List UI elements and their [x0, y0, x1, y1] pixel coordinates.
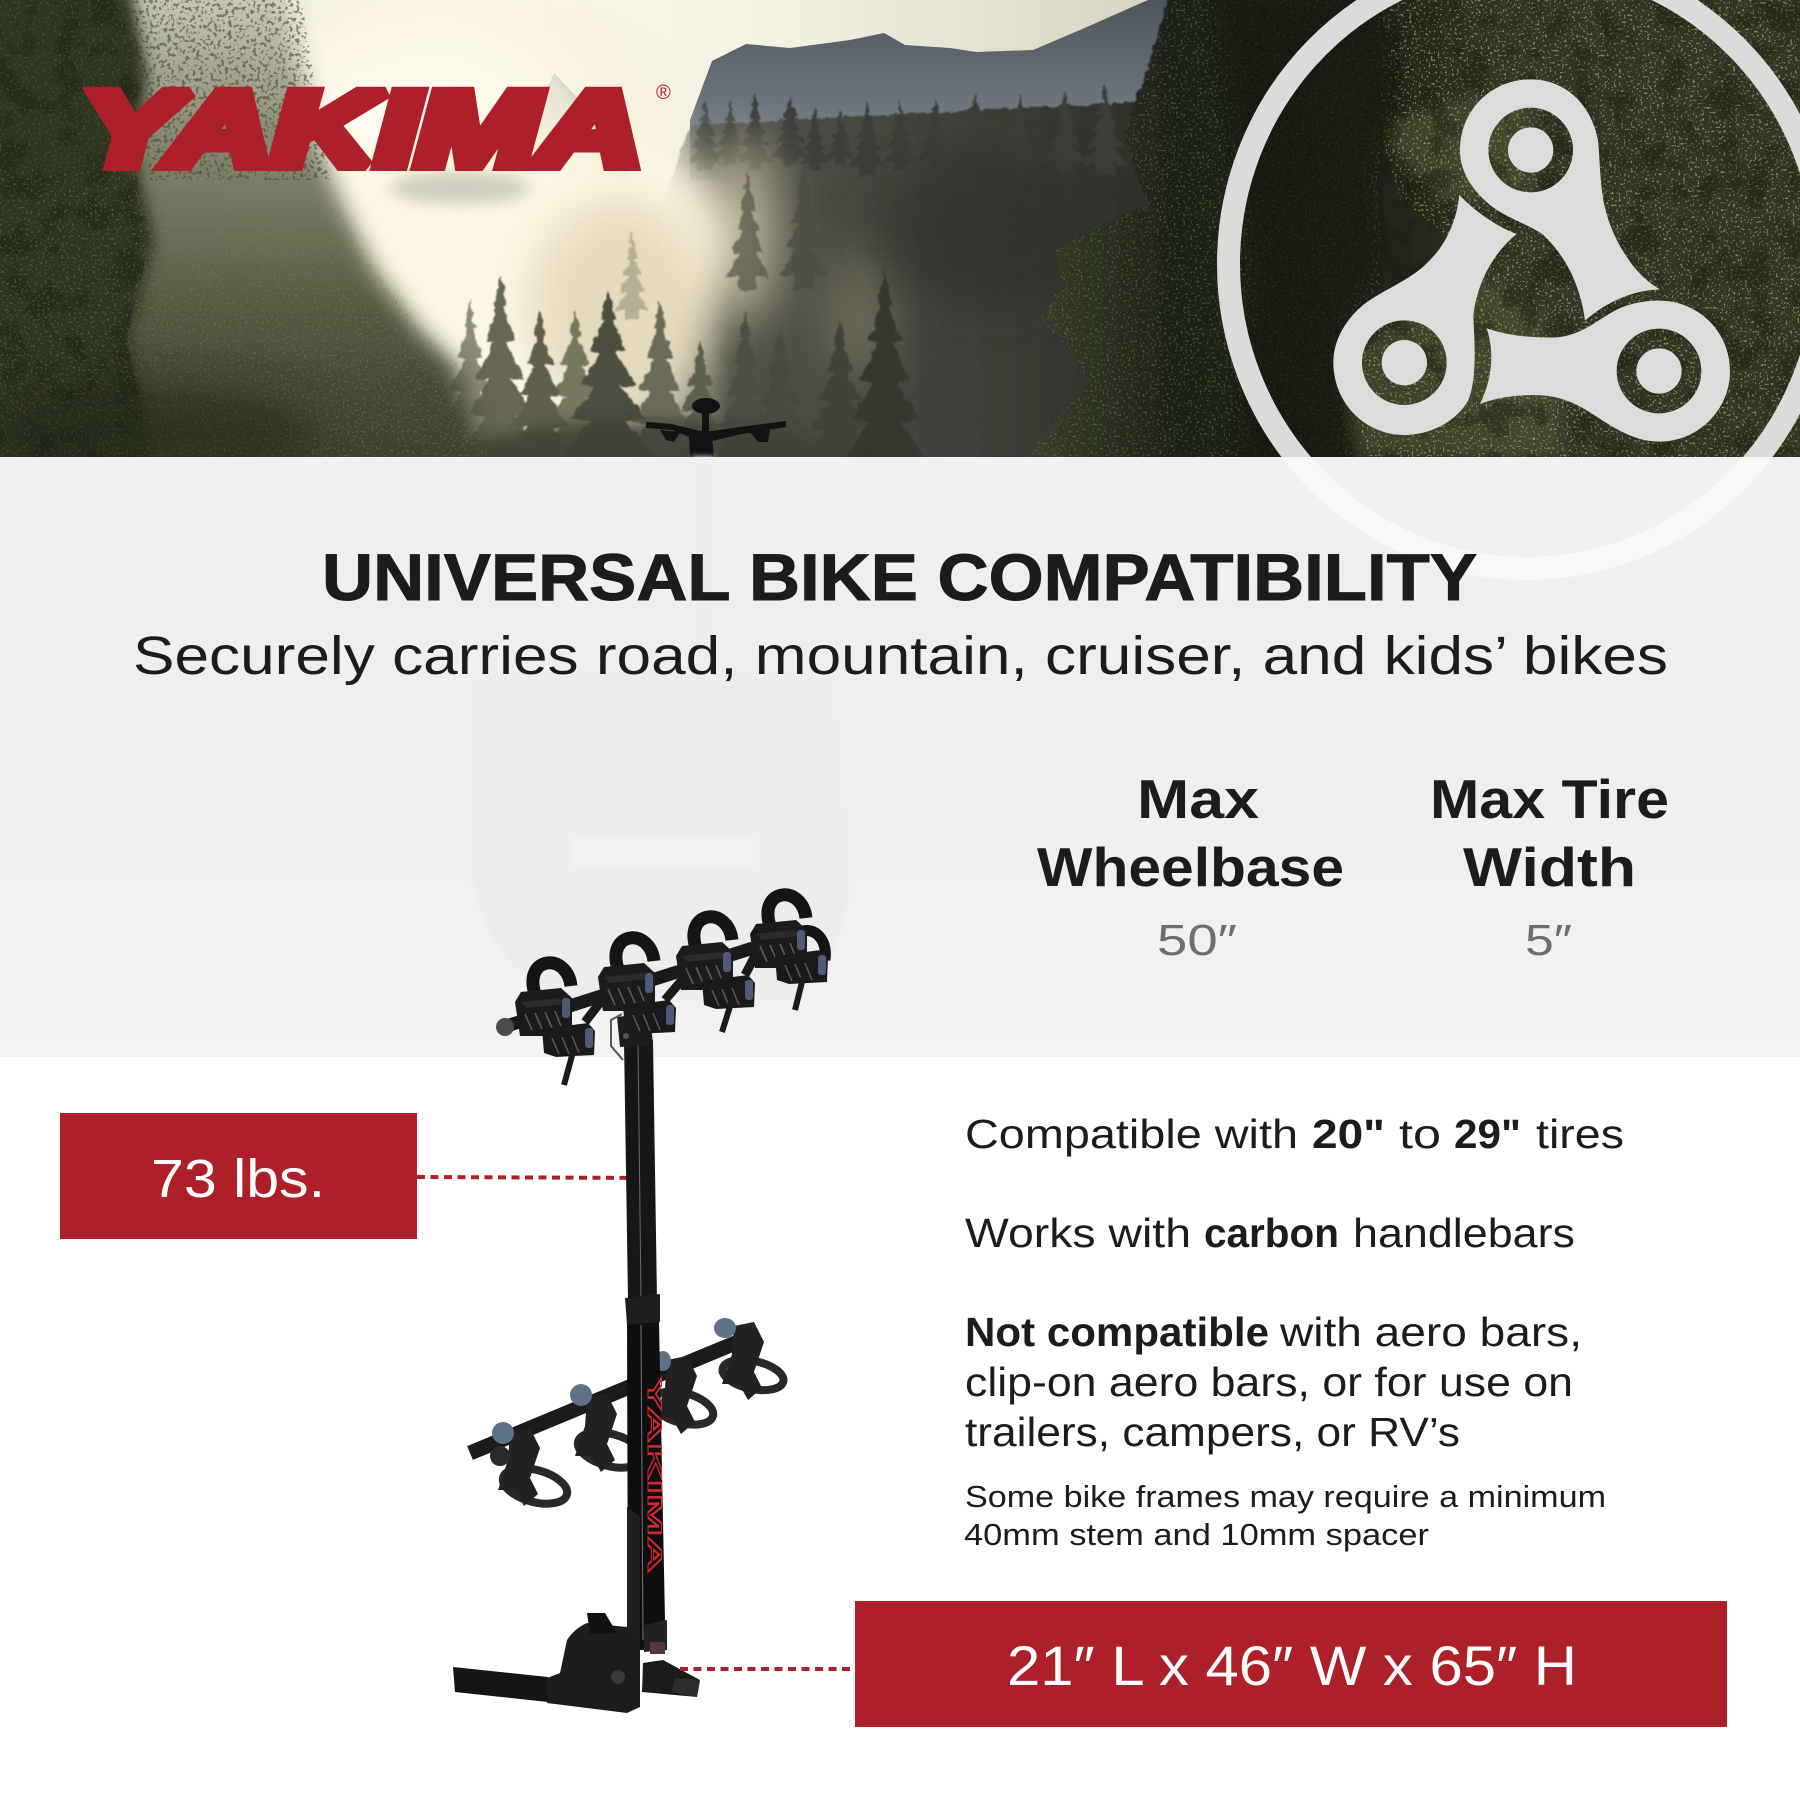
icon: ring around chain link	[1228, 0, 1800, 568]
value: 5 inches: 5″	[1525, 916, 1572, 965]
text: frame note	[964, 1479, 1606, 1552]
right foreground forest	[1020, 0, 1800, 470]
spec: max tire width	[1430, 768, 1669, 965]
mountains	[538, 0, 1169, 180]
upper wheel trays	[515, 895, 828, 1085]
text: carbon handlebars: handlebars	[1353, 1210, 1575, 1256]
text: tire compatibility: Compatible with	[965, 1111, 1298, 1157]
text: not compatible	[965, 1309, 1582, 1455]
text: tire compatibility: to	[1399, 1111, 1441, 1157]
top cross bar	[500, 948, 753, 1028]
value: 50 inches: 50″	[1157, 916, 1237, 965]
text: tire compatibility: 20"	[1312, 1111, 1385, 1157]
spec: max tire width: Max Tire	[1430, 768, 1669, 830]
distant dark forest	[620, 85, 1170, 470]
text: not compatible: clip-on aero bars, or for use on	[965, 1359, 1573, 1405]
left foreground trees	[0, 0, 490, 480]
text: frame note: 40mm stem and 10mm spacer	[964, 1517, 1429, 1552]
subheading: Securely carries road, mountain, cruiser, and kids’ bikes	[133, 626, 1668, 686]
spec: max wheelbase: Wheelbase	[1037, 836, 1344, 898]
dotted leader: dimensions	[680, 1667, 855, 1671]
heading: UNIVERSAL BIKE COMPATIBILITY	[322, 540, 1477, 614]
text: carbon handlebars: Works with	[965, 1210, 1191, 1256]
registered mark: ®	[656, 82, 671, 104]
spec: max tire width: Width	[1463, 836, 1636, 898]
callout: weight: 73 lbs.	[151, 1149, 325, 1209]
rack logo: YAKIMA	[643, 1377, 664, 1574]
text: carbon handlebars: carbon	[1204, 1210, 1339, 1256]
product: hitch bike rack	[453, 895, 828, 1713]
sky	[130, 0, 1148, 430]
panel: translucent compatibility panel	[0, 457, 1800, 1057]
text: tire compatibility: 29"	[1454, 1111, 1521, 1157]
base shadow of the lower forest	[471, 412, 816, 457]
mist and sun glow	[296, 0, 1016, 416]
text: not compatible: trailers, campers, or RV’s	[965, 1409, 1460, 1455]
logo: Yakima	[82, 71, 671, 188]
logo: Yakima: YAKIMA	[82, 71, 642, 188]
lower arm with cradles	[470, 1318, 786, 1510]
mast	[624, 1040, 667, 1654]
spec: max wheelbase: Max	[1137, 768, 1259, 830]
dotted leader: weight	[417, 1177, 650, 1178]
bar end cap	[496, 1018, 514, 1036]
callout: dimensions: 21″ L x 46″ W x 65″ H	[1007, 1634, 1577, 1697]
callout: dimensions	[855, 1601, 1727, 1727]
text: not compatible: Not compatible	[965, 1309, 1269, 1355]
misty conifers standing in the fog	[450, 171, 924, 457]
text: tire compatibility	[965, 1111, 1624, 1157]
top mast bracket and wire handle	[611, 1013, 653, 1060]
text: carbon handlebars	[965, 1210, 1575, 1256]
hitch base and pedal	[453, 1613, 700, 1713]
text: not compatible: with aero bars,	[1279, 1309, 1582, 1355]
text: frame note: Some bike frames may require a minimum	[965, 1479, 1606, 1514]
panel: hero forest photo	[0, 0, 1800, 540]
text: tire compatibility: tires	[1536, 1111, 1624, 1157]
icon: three-link bicycle chain	[1333, 79, 1730, 442]
callout: weight	[60, 1113, 417, 1239]
spec: max wheelbase	[1037, 768, 1344, 965]
bicycle handlebar silhouette	[646, 398, 786, 457]
